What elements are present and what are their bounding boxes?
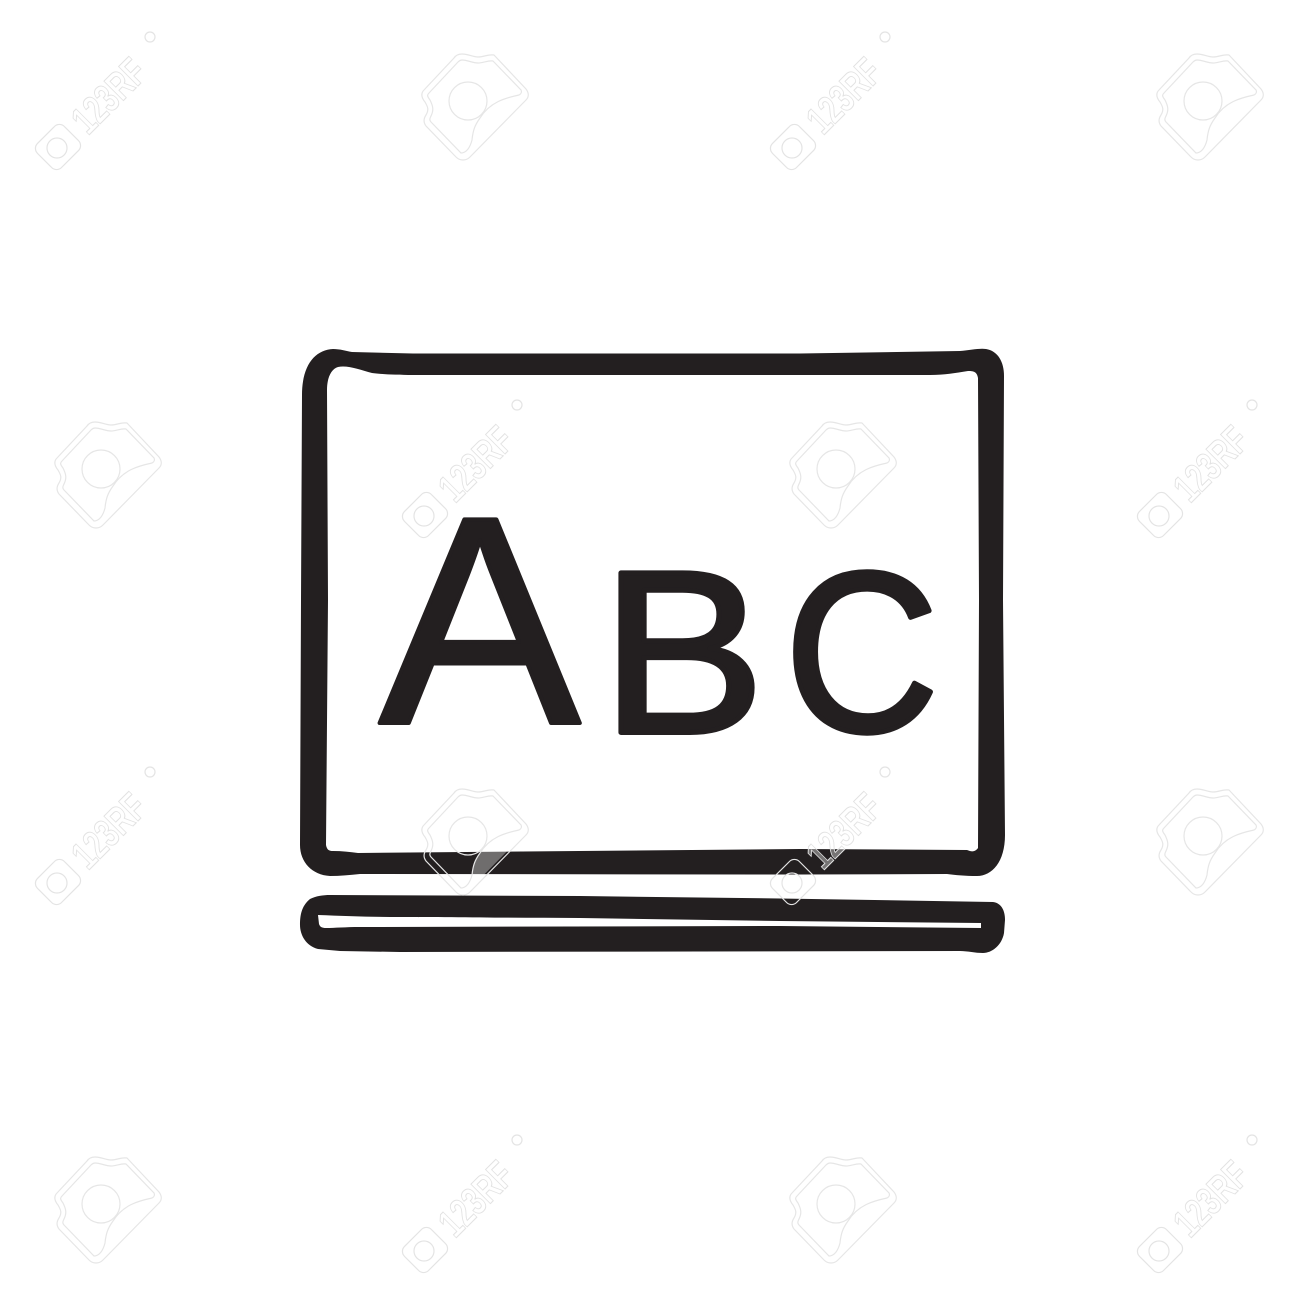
watermark egg 3 [55, 422, 161, 528]
watermark stamp 7 [400, 1135, 523, 1275]
watermark egg 6 [1157, 789, 1263, 895]
watermark egg 5 [422, 789, 528, 895]
watermark stamp 3 [400, 400, 523, 540]
watermark stamp 6 [768, 767, 891, 907]
watermark egg 1 [422, 54, 528, 160]
watermark stamp 5: 123RF [63, 785, 156, 877]
watermark stamp 2: 123RF [798, 50, 891, 142]
letter A: A [379, 456, 582, 786]
watermark stamp 8 [1135, 1135, 1258, 1275]
watermark stamp 4 [1135, 400, 1258, 540]
watermark stamp 5 [33, 767, 156, 907]
letter C: C [785, 525, 939, 780]
watermark stamp 3: 123RF [430, 418, 523, 510]
watermark stamp 8: 123RF [1165, 1153, 1258, 1245]
watermark stamp 1 [33, 32, 156, 172]
watermark stamp 2 [768, 32, 891, 172]
icon: chalk tray [300, 895, 1005, 953]
watermark stamp 6: 123RF [798, 785, 891, 877]
watermark stamp 7: 123RF [430, 1153, 523, 1245]
watermark stamp 1: 123RF [63, 50, 156, 142]
icon: chalkboard frame [300, 349, 1005, 876]
letter B: B [601, 523, 765, 782]
watermark egg 7 [55, 1157, 161, 1263]
watermark egg 4 [790, 422, 896, 528]
watermark egg 2 [1157, 54, 1263, 160]
watermark stamp 4: 123RF [1165, 418, 1258, 510]
watermark egg 8 [790, 1157, 896, 1263]
